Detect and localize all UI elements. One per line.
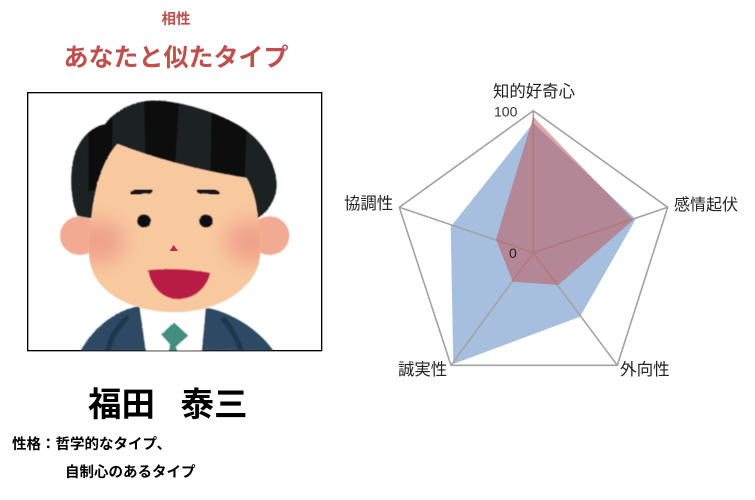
portrait panel bbox=[27, 82, 738, 377]
icon: nose bbox=[170, 245, 178, 251]
icon: eyebrows bbox=[134, 190, 217, 194]
icon: face bbox=[89, 144, 260, 312]
icon: suit and shirt bbox=[81, 305, 273, 352]
personality line 2: 自制心のあるタイプ bbox=[65, 465, 196, 481]
icon: mouth bbox=[148, 269, 210, 299]
heading: compatibility label: 相性 bbox=[162, 12, 190, 28]
person name: 福田 泰三 bbox=[88, 387, 248, 424]
chart series: blue profile bbox=[451, 123, 636, 364]
radar chart bbox=[344, 83, 738, 379]
icon: cheeks bbox=[72, 220, 278, 263]
axis label: curiosity: 知的好奇心 bbox=[493, 83, 575, 101]
axis label: sincerity: 誠実性 bbox=[398, 361, 447, 379]
icon: ears bbox=[60, 216, 289, 255]
icon: eyes bbox=[137, 215, 213, 227]
personality line 1: 性格：哲学的なタイプ、 bbox=[12, 437, 171, 453]
axis label: agreeableness: 協調性 bbox=[344, 195, 393, 213]
title: あなたと似たタイプ bbox=[63, 44, 288, 72]
axis tick: 100: 100 bbox=[494, 104, 518, 120]
axis label: emotional ups and downs: 感情起伏 bbox=[674, 196, 738, 214]
chart axes and outline bbox=[399, 111, 668, 365]
chart series: red profile bbox=[496, 117, 633, 285]
icon: hair bbox=[71, 95, 277, 225]
personality description bbox=[12, 436, 196, 481]
axis label: extraversion: 外向性 bbox=[620, 360, 670, 379]
axis tick: 0: 0 bbox=[509, 245, 517, 261]
